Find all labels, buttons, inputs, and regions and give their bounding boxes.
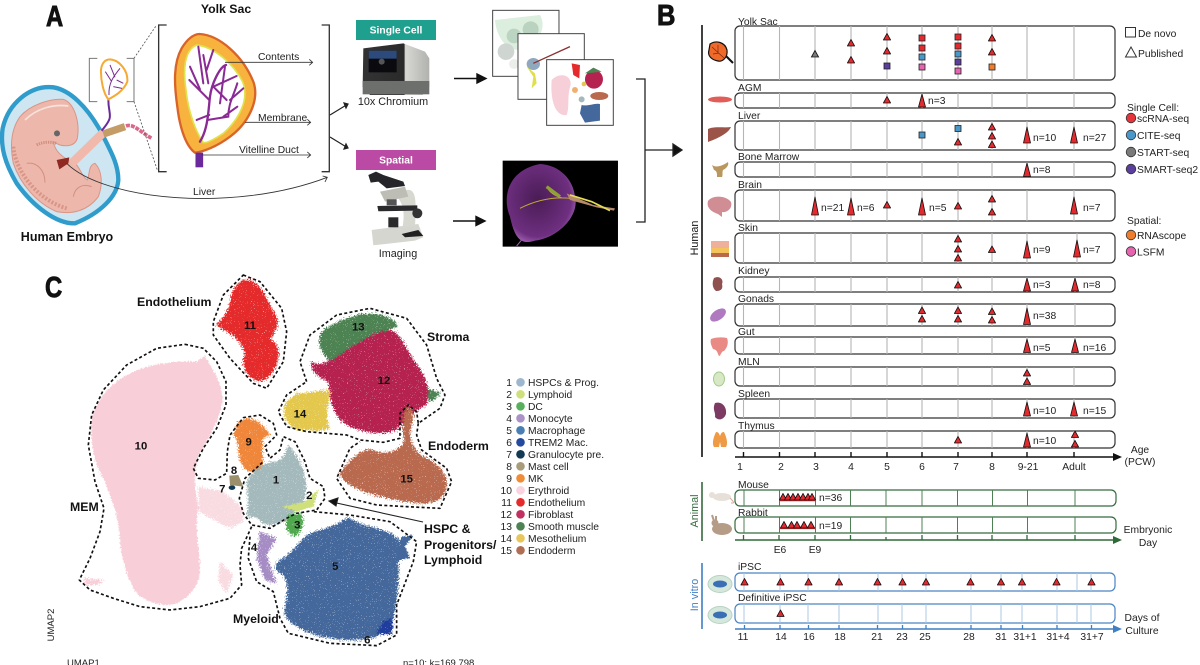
arrow: to single cell results xyxy=(454,74,486,83)
cluster number labels: 1 xyxy=(273,474,279,486)
cluster legend: 9 xyxy=(506,474,512,485)
label: Contents: Contents xyxy=(258,52,299,63)
row: Brain xyxy=(735,180,1115,221)
row: Gut: n=5 xyxy=(1033,343,1051,354)
cluster legend: HSPCs & Prog. xyxy=(528,378,599,389)
cluster number labels: 7 xyxy=(219,483,225,495)
days of culture axis: 23 xyxy=(896,632,908,643)
axis label: Human: Human xyxy=(689,221,701,255)
row: AGM: AGM xyxy=(738,83,761,94)
panel letter A: A xyxy=(46,0,63,33)
icon: yolk sac xyxy=(709,42,733,63)
label: HSPC & Progenitors / Lymphoid: Lymphoid xyxy=(424,553,482,567)
cluster legend: Smooth muscle xyxy=(528,522,599,533)
days of culture axis xyxy=(735,625,1122,643)
cluster legend: 8 xyxy=(506,462,512,473)
age axis (PCW): 5 xyxy=(884,462,890,473)
cluster 15: endoderm xyxy=(340,407,447,503)
cluster 9: MK xyxy=(233,419,270,472)
row: Skin: n=9 xyxy=(1033,245,1051,256)
UMAP scatter clusters xyxy=(79,275,452,646)
cluster 13: smooth muscle xyxy=(319,314,398,362)
section: In vitro xyxy=(689,562,1160,643)
row: Spleen: n=10 xyxy=(1033,406,1056,417)
cluster 3: DC xyxy=(286,513,303,537)
cluster 7: granulocyte xyxy=(229,485,235,490)
cluster number labels: 9 xyxy=(245,436,252,448)
age axis (PCW): 8 xyxy=(989,462,995,473)
panel C: UMAP xyxy=(45,271,604,665)
cluster legend: 14 xyxy=(501,534,512,545)
cluster number labels: 15 xyxy=(400,474,413,486)
icon: liver xyxy=(708,127,731,142)
cluster legend: MK xyxy=(528,474,544,485)
days of culture axis: 31+7 xyxy=(1080,632,1104,643)
panel B: sampling timeline xyxy=(657,0,1198,643)
cluster legend: Endoderm xyxy=(528,546,576,557)
axis title: Age (PCW): Age xyxy=(1131,445,1149,456)
row: Gonads: n=38 xyxy=(1033,311,1056,322)
row: Kidney: Kidney xyxy=(738,266,770,277)
icon: culture dish xyxy=(708,606,732,624)
cluster number labels xyxy=(135,320,413,646)
row: Rabbit: Rabbit xyxy=(738,508,768,519)
legend: Published xyxy=(1126,47,1183,60)
section: Animal xyxy=(689,480,1172,556)
icon: kidney xyxy=(713,277,723,291)
days of culture axis: 28 xyxy=(963,632,975,643)
row: Yolk Sac: Yolk Sac xyxy=(738,17,778,28)
cluster legend: Mesothelium xyxy=(528,534,586,545)
row: Skin xyxy=(735,223,1115,263)
days of culture axis: 31 xyxy=(995,632,1007,643)
age axis (PCW): Adult xyxy=(1062,462,1086,473)
label: Membrane: Membrane xyxy=(258,113,307,124)
connector bracket: A to B xyxy=(636,79,682,222)
cluster legend: Mast cell xyxy=(528,462,569,473)
row: Yolk Sac xyxy=(735,17,1115,80)
days of culture axis: 11 xyxy=(738,632,749,643)
row: Mouse: Mouse xyxy=(738,480,769,491)
cluster number labels: 10 xyxy=(135,441,147,453)
cluster 8: mast cell xyxy=(229,475,243,487)
icon: bone xyxy=(712,162,728,177)
panel A: embryo to data workflow xyxy=(2,0,682,260)
days of culture axis: 31+4 xyxy=(1046,632,1070,643)
icon: rabbit xyxy=(712,515,732,535)
cluster legend: 7 xyxy=(506,450,512,461)
row: Brain: n=7 xyxy=(1083,203,1101,214)
embryonic day axis: E6 xyxy=(774,545,787,556)
row: Gut: n=16 xyxy=(1083,343,1106,354)
cluster legend: Erythroid xyxy=(528,486,569,497)
row: Gut: Gut xyxy=(738,327,755,338)
cluster number labels: 8 xyxy=(231,465,237,477)
row: Bone Marrow: Bone Marrow xyxy=(738,152,800,163)
icon: gut xyxy=(711,337,728,356)
cluster legend xyxy=(501,378,604,557)
cluster number labels: 3 xyxy=(294,519,300,531)
row: Liver: Liver xyxy=(738,111,761,122)
arrows to single cell and spatial xyxy=(330,103,348,149)
icon: microscope xyxy=(368,172,423,245)
icon: 10x Chromium instrument xyxy=(363,43,429,95)
cluster legend: 4 xyxy=(506,414,512,425)
cluster legend: 12 xyxy=(501,510,512,521)
cluster legend: Monocyte xyxy=(528,414,573,425)
icon: mouse xyxy=(709,492,734,503)
row: Gonads xyxy=(735,294,1115,326)
label: Human Embryo: Human Embryo xyxy=(21,230,114,244)
banner: Spatial xyxy=(356,150,436,170)
row: Spleen: n=15 xyxy=(1083,406,1106,417)
cluster 10: erythroid xyxy=(83,356,243,605)
age axis (PCW): 1 xyxy=(737,462,743,473)
cluster legend: Fibroblast xyxy=(528,510,573,521)
cluster legend: Lymphoid xyxy=(528,390,573,401)
row: Thymus: Thymus xyxy=(738,421,775,432)
cluster number labels: 2 xyxy=(306,490,312,502)
cluster legend: 3 xyxy=(506,402,512,413)
axis label: In vitro xyxy=(689,563,702,629)
cluster number labels: 4 xyxy=(251,542,258,554)
days of culture axis: 31+1 xyxy=(1013,632,1037,643)
icon: skin xyxy=(711,241,729,257)
illustration: human embryo xyxy=(2,25,157,223)
days of culture axis: 25 xyxy=(919,632,931,643)
legend: data type and modalities xyxy=(1126,28,1198,258)
label: HSPC & Progenitors / Lymphoid: Progenitors/ xyxy=(424,538,497,552)
label: Myeloid: Myeloid xyxy=(233,612,279,626)
cluster number labels: 11 xyxy=(244,320,256,332)
age axis (PCW): 7 xyxy=(953,462,959,473)
row: MLN: MLN xyxy=(738,357,760,368)
illustration: yolk sac cross-section xyxy=(67,25,329,199)
row: Liver: n=10 xyxy=(1033,133,1056,144)
row: Skin: n=7 xyxy=(1083,245,1101,256)
legend: Single Cell: Single Cell: xyxy=(1127,103,1179,114)
banner: Single Cell: Single Cell xyxy=(370,26,422,36)
days of culture axis: 14 xyxy=(775,632,787,643)
row: Mouse: n=36 xyxy=(819,493,842,504)
row: iPSC xyxy=(735,562,1115,591)
legend: Spatial: RNAscope xyxy=(1137,231,1186,242)
legend: Single Cell xyxy=(1126,103,1198,176)
icon: culture dish xyxy=(708,576,732,592)
cluster number labels: 14 xyxy=(294,409,307,421)
icon: spleen xyxy=(714,403,726,419)
label: Vitelline Duct: Vitelline Duct xyxy=(239,145,299,156)
axis label: Animal: Animal xyxy=(689,494,701,528)
icon: AGM xyxy=(708,96,732,102)
row: Thymus xyxy=(735,421,1115,448)
cluster number labels: 12 xyxy=(378,375,390,387)
cluster legend: Granulocyte pre. xyxy=(528,450,604,461)
legend: De novo xyxy=(1126,28,1177,40)
image: light-sheet yolk sac xyxy=(503,161,618,247)
row: Kidney xyxy=(735,266,1115,292)
cluster 12: fibroblast xyxy=(311,330,428,433)
legend: Single Cell: SMART-seq2 xyxy=(1137,165,1198,176)
cluster 4: monocyte xyxy=(257,532,277,583)
row: Brain: n=5 xyxy=(929,203,947,214)
row: Gonads: Gonads xyxy=(738,294,774,305)
label: Stroma: Stroma xyxy=(427,330,470,344)
cluster legend: 13 xyxy=(501,522,512,533)
row: Skin: Skin xyxy=(738,223,758,234)
legend: Spatial: LSFM xyxy=(1137,248,1164,258)
row: Definitive iPSC: Definitive iPSC xyxy=(738,593,807,604)
cluster legend: TREM2 Mac. xyxy=(528,438,588,449)
cluster legend: Endothelium xyxy=(528,498,585,509)
cluster legend: 11 xyxy=(501,498,512,509)
arrow: to HSPC cluster xyxy=(329,498,423,522)
days of culture axis: 18 xyxy=(834,632,846,643)
cluster 14: mesothelium xyxy=(284,390,332,431)
row: Liver: n=27 xyxy=(1083,133,1106,144)
row: Definitive iPSC xyxy=(735,593,1115,623)
axis title: Days of Culture: Culture xyxy=(1125,626,1159,637)
row: MLN xyxy=(735,357,1115,386)
region outlines xyxy=(79,275,452,646)
row: Brain: Brain xyxy=(738,180,762,191)
legend: Single Cell: scRNA-seq xyxy=(1137,114,1189,125)
row: Brain: n=6 xyxy=(857,203,875,214)
legend: Single Cell: CITE-seq xyxy=(1137,131,1181,142)
row: AGM: n=3 xyxy=(928,96,946,107)
row: Gut xyxy=(735,327,1115,354)
row: Kidney: n=3 xyxy=(1033,280,1051,291)
age axis (PCW): 6 xyxy=(919,462,925,473)
icon: gonads xyxy=(708,306,728,324)
icon: brain xyxy=(708,197,731,217)
cluster legend: 1 xyxy=(506,378,512,389)
row: Spleen xyxy=(735,389,1115,418)
axis title: Days of Culture: Days of xyxy=(1125,613,1160,624)
axis label: In vitro: In vitro xyxy=(689,579,701,611)
cluster number labels: 13 xyxy=(352,322,365,334)
legend: Spatial: Spatial: xyxy=(1127,216,1161,227)
cluster 11: endothelium xyxy=(216,279,279,381)
row: Brain: n=21 xyxy=(821,203,844,214)
embryonic day axis xyxy=(735,535,1122,556)
legend: De novo: De novo xyxy=(1138,29,1177,40)
days of culture axis: 16 xyxy=(803,632,815,643)
panel letter C: C xyxy=(45,271,62,304)
label: Imaging: Imaging xyxy=(379,248,417,260)
axis label: UMAP2: UMAP2 xyxy=(46,609,57,641)
cluster legend: DC xyxy=(528,402,543,413)
label: MEM: MEM xyxy=(70,500,99,514)
age axis (PCW) xyxy=(735,452,1122,473)
cluster number labels: 6 xyxy=(364,634,370,646)
heading: Yolk Sac: Yolk Sac xyxy=(201,2,251,16)
cluster number labels: 5 xyxy=(332,561,338,573)
legend: Published: Published xyxy=(1138,49,1183,60)
label: HSPC & Progenitors / Lymphoid: HSPC & xyxy=(424,522,471,536)
axis title: Embryonic Day: Day xyxy=(1139,538,1158,549)
cluster 6: TREM2 macrophage xyxy=(377,618,393,635)
label: 10x Chromium: 10x Chromium xyxy=(358,96,428,108)
cluster 5: macrophage xyxy=(275,517,404,640)
legend: Spatial xyxy=(1126,216,1186,258)
row: Bone Marrow: n=8 xyxy=(1033,165,1051,176)
row: Kidney: n=8 xyxy=(1083,280,1101,291)
row: Mouse xyxy=(735,480,1116,506)
cluster 2: lymphoid xyxy=(282,490,318,512)
age axis (PCW): 9-21 xyxy=(1018,462,1039,473)
row: iPSC: iPSC xyxy=(738,562,762,573)
legend: Single Cell: START-seq xyxy=(1137,148,1190,159)
organ icons column xyxy=(708,42,733,447)
embryonic day axis: E9 xyxy=(809,545,822,556)
age axis (PCW): 2 xyxy=(778,462,784,473)
banner: Spatial: Spatial xyxy=(379,156,413,166)
icon: thymus xyxy=(713,432,727,447)
cluster legend: 6 xyxy=(506,438,512,449)
cluster legend: 5 xyxy=(506,426,512,437)
cluster legend: 2 xyxy=(506,390,512,401)
thumbnails: stacked UMAP plots xyxy=(493,10,613,125)
cluster legend: 15 xyxy=(501,546,512,557)
axis title: Age (PCW): (PCW) xyxy=(1125,457,1155,468)
age axis (PCW): 4 xyxy=(848,462,854,473)
row: Rabbit: n=19 xyxy=(819,521,842,532)
row: Liver xyxy=(735,111,1115,150)
age axis (PCW): 3 xyxy=(813,462,819,473)
axis label: Animal xyxy=(689,482,702,541)
label: Endoderm: Endoderm xyxy=(428,439,489,453)
row: AGM xyxy=(735,83,1115,108)
cluster legend: 10 xyxy=(501,486,512,497)
row: Spleen: Spleen xyxy=(738,389,770,400)
arrow: to imaging result xyxy=(453,216,485,226)
row: Thymus: n=10 xyxy=(1033,436,1056,447)
days of culture axis: 21 xyxy=(871,632,883,643)
cluster 1: HSPCs xyxy=(247,445,306,525)
banner: Single Cell xyxy=(356,20,436,40)
axis title: Embryonic Day: Embryonic xyxy=(1124,525,1172,536)
label: Liver: Liver xyxy=(193,187,216,198)
row: Bone Marrow xyxy=(735,152,1115,177)
row: Rabbit xyxy=(735,508,1116,533)
icon: mediastinal lymph node xyxy=(714,372,724,386)
label: Endothelium: Endothelium xyxy=(137,295,212,309)
cluster legend: Macrophage xyxy=(528,426,586,437)
